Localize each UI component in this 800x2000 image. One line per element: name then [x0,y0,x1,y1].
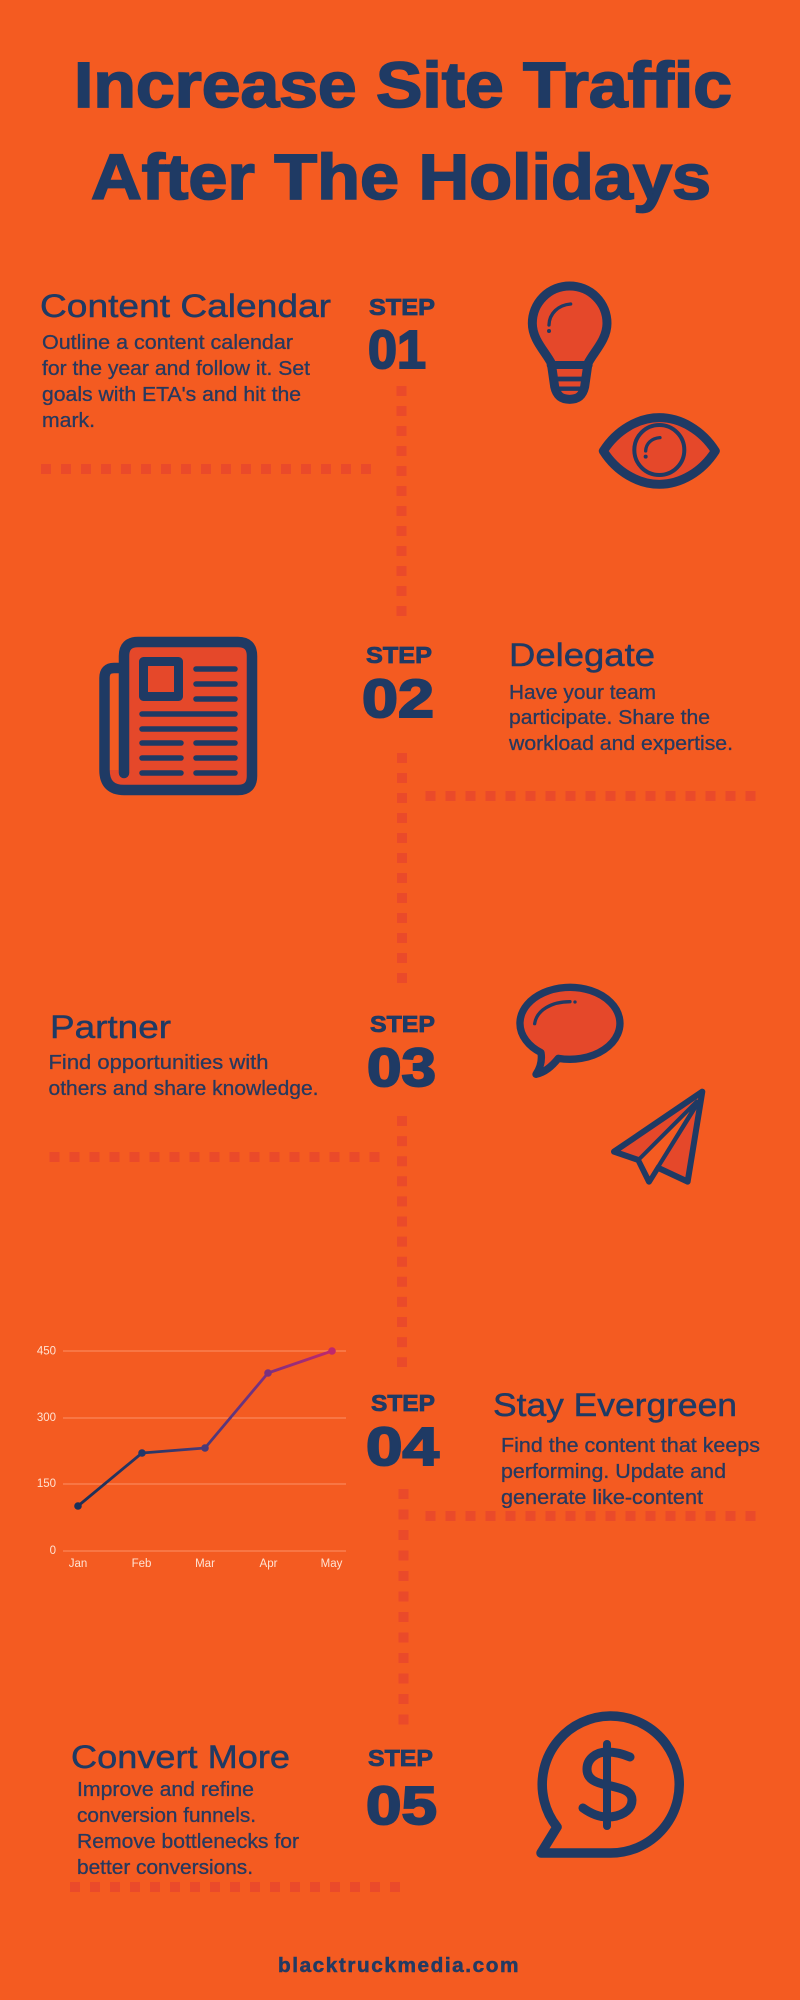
step 05 label: 05 [366,1776,437,1836]
step 02 label: STEP [366,642,432,668]
panel: step 1 text [40,288,331,432]
step 02 label: 02 [362,669,434,729]
body: delegate [508,681,733,755]
step 04 label: 04 [366,1417,439,1477]
body: stay evergreen: performing. Update and [501,1460,726,1483]
chart x axis labels [69,1558,343,1570]
icon: newspaper [104,642,252,790]
dotted connector: vertical 1 [396,386,406,616]
panel: step 2 text [508,637,733,755]
icon: speech bubble [520,987,620,1074]
title [74,49,732,213]
dotted divider: step 3 [50,1152,380,1162]
body: delegate: participate. Share the [509,706,710,729]
body: content calendar: mark. [42,409,95,432]
body: content calendar: goals with ETA's and hit the [42,383,301,406]
icon: dollar speech bubble [541,1716,679,1853]
chart y axis labels: 300 [37,1412,56,1424]
step 03 label: STEP [370,1011,435,1037]
step 03 label: 03 [367,1038,436,1098]
chart points [74,1347,336,1510]
body: convert more [77,1778,299,1879]
heading: convert more: Convert More [71,1739,290,1775]
line chart [37,1346,346,1570]
body: convert more: Improve and refine [77,1778,254,1801]
title: Increase Site Traffic [74,49,732,121]
heading: partner: Partner [50,1009,171,1045]
dotted connector: vertical 2 [397,753,407,983]
heading: delegate: Delegate [509,637,655,673]
chart x axis labels: Mar [195,1558,215,1570]
step 05 label: STEP [368,1745,433,1771]
body: delegate: workload and expertise. [508,732,733,755]
panel: step 3 text [48,1009,318,1100]
dotted divider: step 4 [426,1511,756,1521]
chart line [78,1351,332,1506]
chart y axis labels: 0 [50,1545,56,1557]
step 05 label [366,1745,437,1836]
panel: step 5 text [71,1739,299,1879]
icon: light bulb [532,286,607,399]
chart y axis labels: 150 [37,1478,56,1490]
body: content calendar [42,331,310,432]
body: delegate: Have your team [509,681,656,704]
dotted divider: step 1 [41,464,371,474]
dotted connector: vertical 4 [398,1489,408,1725]
body: partner: Find opportunities with [48,1051,268,1074]
body: content calendar: Outline a content calendar [42,331,293,354]
chart x axis labels: Apr [260,1558,278,1570]
body: convert more: better conversions. [77,1856,253,1879]
dotted divider: step 5 [70,1882,400,1892]
body: stay evergreen [501,1434,760,1509]
step 01 label: 01 [368,320,426,380]
body: partner: others and share knowledge. [48,1077,318,1100]
chart x axis labels: May [321,1558,343,1570]
step 03 label [367,1011,436,1098]
dotted connector: vertical 3 [397,1116,407,1367]
chart x axis labels: Jan [69,1558,87,1570]
step 01 label [368,294,435,380]
chart y axis labels [37,1346,56,1557]
heading: content calendar: Content Calendar [40,288,331,324]
step 01 label: STEP [369,294,435,320]
chart x axis labels: Feb [132,1558,151,1570]
step 04 label [366,1390,439,1477]
footer: website: blacktruckmedia.com [278,1955,520,1977]
chart y axis labels: 450 [37,1346,56,1358]
heading: stay evergreen: Stay Evergreen [493,1387,737,1423]
icon: eye [603,418,715,484]
title: After The Holidays [91,141,711,213]
step 02 label [362,642,434,729]
step 04 label: STEP [371,1390,435,1416]
dotted divider: step 2 [426,791,756,801]
body: content calendar: for the year and follow it. Set [42,357,310,380]
panel: step 4 text [493,1387,760,1509]
body: partner [48,1051,318,1100]
icon: paper plane [614,1092,702,1182]
body: convert more: Remove bottlenecks for [77,1830,299,1853]
body: convert more: conversion funnels. [77,1804,256,1827]
body: stay evergreen: generate like-content [501,1486,703,1509]
body: stay evergreen: Find the content that keeps [501,1434,760,1457]
